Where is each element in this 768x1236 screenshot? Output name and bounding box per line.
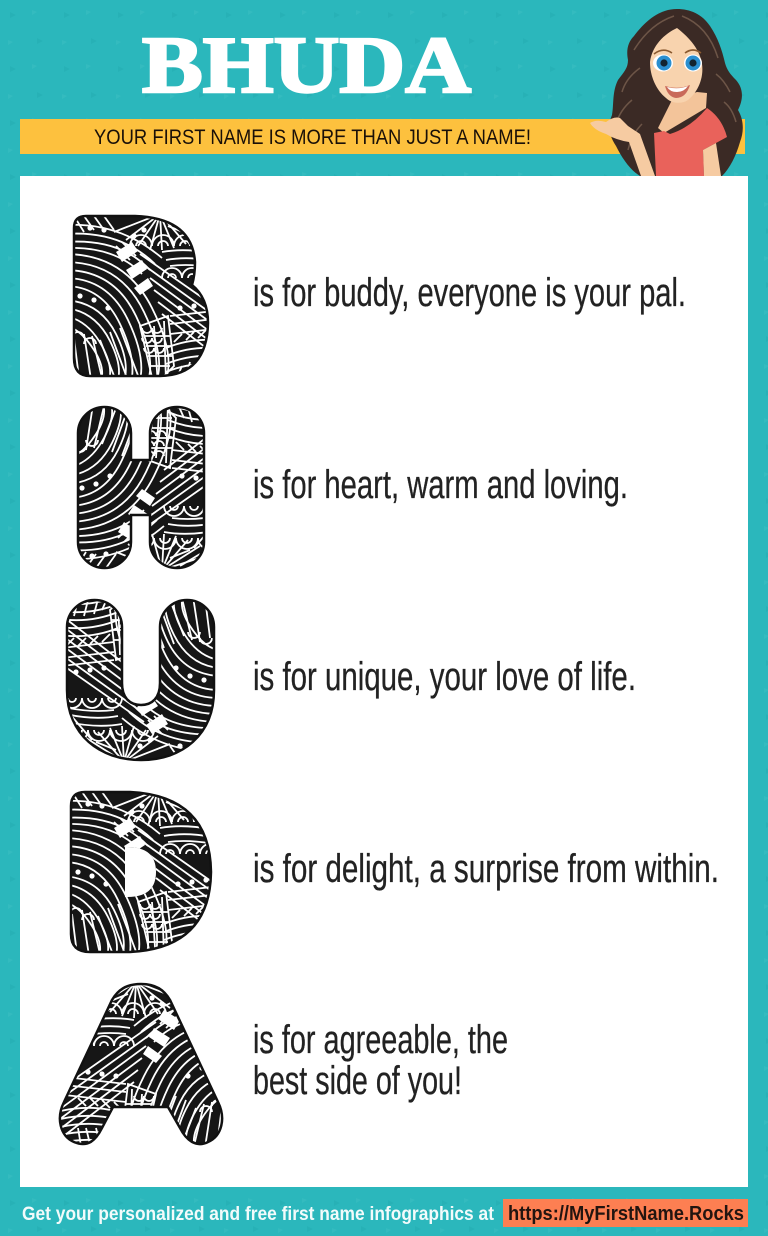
text: A lines: is for agreeable, the	[253, 1018, 508, 1062]
letter D	[70, 790, 212, 954]
letter B	[72, 214, 210, 378]
left arm and hand	[590, 118, 655, 176]
banner: tagline	[20, 119, 745, 154]
title: BHUDA	[142, 22, 471, 110]
eyes and brows	[653, 50, 702, 72]
face	[650, 28, 702, 103]
shirt	[654, 108, 727, 176]
hair	[609, 9, 743, 176]
letter H	[76, 406, 206, 570]
footer link: https://MyFirstName.Rocks	[508, 1203, 744, 1225]
panel: letters	[20, 176, 748, 1187]
text: A lines	[253, 1018, 508, 1103]
hair highlights	[616, 16, 736, 150]
letter U	[66, 598, 216, 762]
text: H line: is for heart, warm and loving.	[253, 463, 628, 507]
illustration: woman presenting	[590, 9, 743, 176]
banner: tagline: YOUR FIRST NAME IS MORE THAN JUST A NAME!	[94, 126, 531, 149]
text: A lines: best side of you!	[253, 1059, 462, 1103]
letter A	[58, 982, 224, 1146]
right arm	[703, 143, 721, 176]
footer text: Get your personalized and free first name infographics at	[22, 1204, 495, 1225]
neck	[658, 92, 707, 133]
mouth	[665, 85, 690, 98]
text: U line: is for unique, your love of life.	[253, 655, 636, 699]
